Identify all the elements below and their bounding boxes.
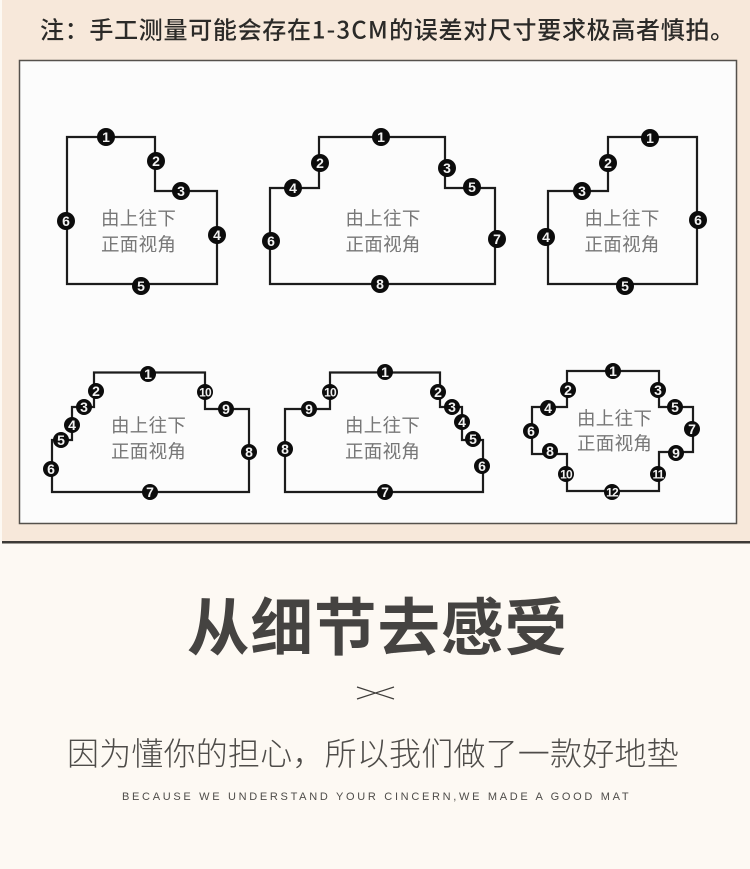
diagram 6: octagonal stepped: 4 — [544, 400, 552, 416]
diagram 4: stepped left — [43, 366, 257, 500]
diagram 2: double notch: 正面视角 — [346, 231, 421, 257]
subheading: 因为懂你的担心，所以我们做了一款好地垫 — [67, 729, 679, 775]
diagram 5: stepped right: 10 — [324, 386, 337, 400]
diagram 1: top-right notch: 6 — [62, 213, 70, 229]
diagram 6: octagonal stepped: 9 — [672, 445, 680, 461]
diagram 4: stepped left: 由上往下 — [111, 412, 186, 438]
diagram 2: double notch: 4 — [289, 180, 297, 196]
diagram 5: stepped right — [277, 364, 490, 500]
diagram 5: stepped right: 正面视角 — [345, 438, 420, 464]
note heading: 注：手工测量可能会存在1-3CM的误差对尺寸要求极高者慎拍。 — [40, 10, 735, 46]
diagram 2: double notch: 由上往下 — [346, 205, 421, 231]
diagram 3: top-left notch: 由上往下 — [584, 205, 660, 231]
diagram 2: double notch: 2 — [316, 155, 324, 171]
diagram 6: octagonal stepped: 8 — [546, 443, 554, 459]
diagram 2: double notch: 5 — [468, 179, 476, 195]
diagram 6: octagonal stepped: 7 — [688, 421, 696, 437]
diagram 4: stepped left: 5 — [57, 432, 65, 448]
diagram 3: top-left notch — [537, 129, 707, 295]
diagram 3: top-left notch: 2 — [604, 155, 612, 171]
diagram 6: octagonal stepped: 10 — [560, 468, 573, 482]
diagram 5: stepped right: 6 — [478, 458, 486, 474]
diagram 4: stepped left: 正面视角 — [111, 438, 186, 464]
diagram 4: stepped left: 3 — [80, 399, 88, 415]
diagram 3: top-left notch: 5 — [621, 278, 629, 294]
diagram 4: stepped left: 9 — [222, 401, 230, 417]
diagram 1: top-right notch: 2 — [152, 153, 160, 169]
diagram 5: stepped right: 由上往下 — [345, 412, 420, 438]
diagram 3: top-left notch: 1 — [646, 130, 654, 146]
diagram 2: double notch: 7 — [493, 231, 501, 247]
diagram 6: octagonal stepped: 5 — [671, 399, 679, 415]
diagram 5: stepped right: 3 — [448, 399, 456, 415]
diagram 1: top-right notch: 正面视角 — [101, 231, 176, 257]
diagram 5: stepped right: 1 — [381, 364, 389, 380]
diagram 1: top-right notch — [57, 128, 226, 295]
diagram 4: stepped left: 10 — [199, 386, 212, 400]
diagram 2: double notch: 1 — [377, 129, 385, 145]
diagram 6: octagonal stepped: 12 — [606, 486, 619, 500]
diagram 1: top-right notch: 3 — [177, 183, 185, 199]
diagram 3: top-left notch: 6 — [694, 212, 702, 228]
diagram 1: top-right notch: 1 — [102, 129, 110, 145]
diagram 6: octagonal stepped: 3 — [654, 382, 662, 398]
diagram 6: octagonal stepped: 6 — [527, 423, 535, 439]
panel: shape diagrams — [20, 60, 736, 524]
diagram 6: octagonal stepped: 2 — [564, 382, 572, 398]
diagram 5: stepped right: 4 — [458, 414, 466, 430]
diagram 4: stepped left: 4 — [68, 417, 76, 433]
diagram 6: octagonal stepped: 1 — [609, 363, 617, 379]
diagram 1: top-right notch: 由上往下 — [101, 205, 176, 231]
diagram 4: stepped left: 2 — [92, 383, 100, 399]
diagram 5: stepped right: 8 — [281, 441, 289, 457]
icon: cross mark — [357, 687, 394, 699]
diagram 5: stepped right: 7 — [381, 484, 389, 500]
diagram 2: double notch: 8 — [376, 276, 384, 292]
diagram 2: double notch: 6 — [267, 233, 275, 249]
diagram 3: top-left notch: 4 — [542, 229, 550, 245]
diagram 5: stepped right: 9 — [305, 401, 313, 417]
diagram 3: top-left notch: 3 — [578, 183, 586, 199]
diagram 1: top-right notch: 4 — [213, 227, 221, 243]
diagram 2: double notch — [262, 128, 506, 293]
english caption: BECAUSE WE UNDERSTAND YOUR CINCERN,WE MADE A GOOD MAT — [122, 791, 631, 803]
diagram 5: stepped right: 5 — [469, 431, 477, 447]
diagram 3: top-left notch: 正面视角 — [584, 231, 660, 257]
diagram 6: octagonal stepped: 11 — [652, 468, 665, 482]
diagram 6: octagonal stepped: 正面视角 — [577, 430, 652, 456]
diagram 4: stepped left: 8 — [245, 444, 253, 460]
diagram 4: stepped left: 7 — [146, 484, 154, 500]
diagram 6: octagonal stepped: 由上往下 — [577, 405, 652, 431]
diagram 1: top-right notch: 5 — [137, 278, 145, 294]
diagram 2: double notch: 3 — [443, 160, 451, 176]
diagram 4: stepped left: 6 — [47, 461, 55, 477]
panel: peach header background — [2, 0, 750, 541]
diagram 4: stepped left: 1 — [144, 366, 152, 382]
main heading: 从细节去感受 — [187, 577, 568, 668]
diagram 6: octagonal stepped — [523, 363, 700, 500]
diagram 5: stepped right: 2 — [434, 384, 442, 400]
